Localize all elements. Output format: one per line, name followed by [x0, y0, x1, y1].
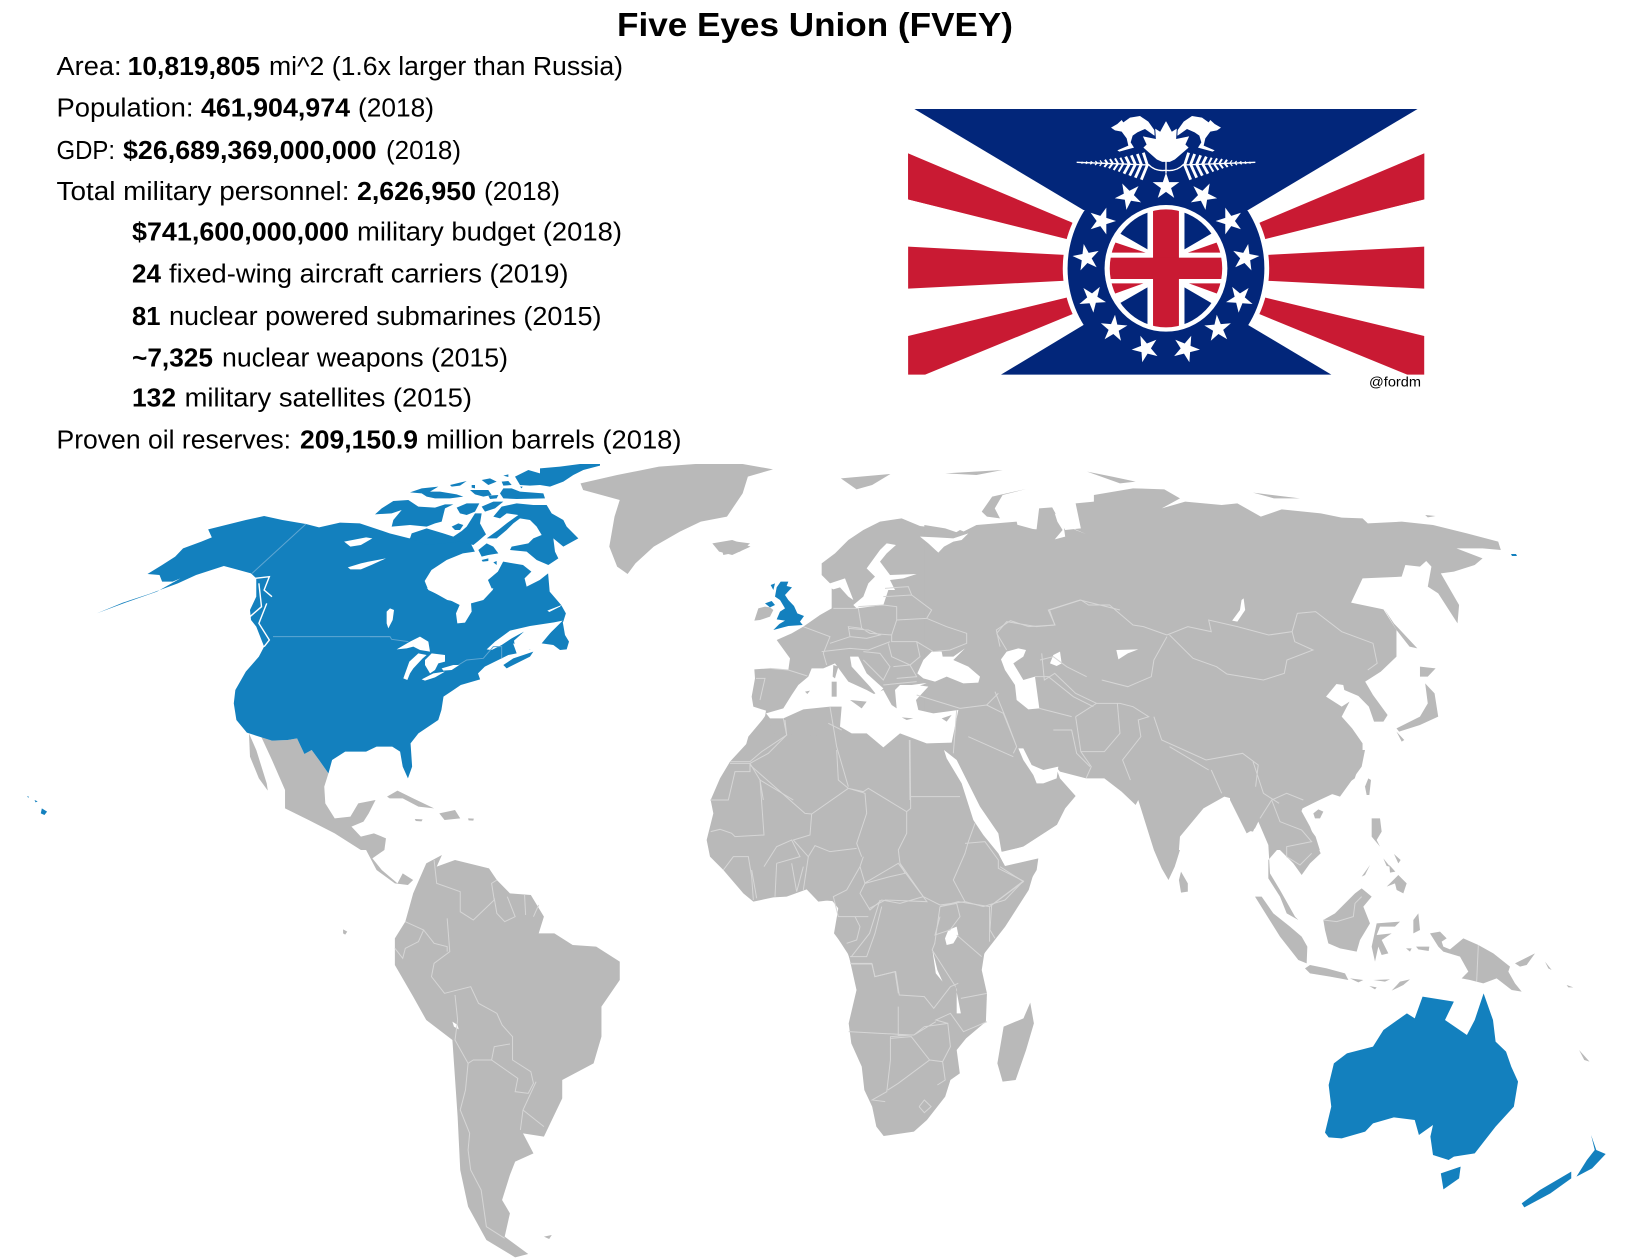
stat: satellites: 132 — [132, 385, 176, 413]
islands in the seas — [805, 665, 952, 722]
stat: military budget: military budget (2018) — [357, 219, 622, 247]
stat: GDP: $26,689,369,000,000 — [123, 137, 377, 165]
stat: aircraft carriers: fixed-wing aircraft carriers (2019) — [169, 261, 568, 289]
flag stripes and field — [908, 109, 1424, 376]
stat: aircraft carriers: 24 — [132, 261, 162, 289]
emblem: kangaroos, maple leaf and ferns — [1077, 116, 1255, 180]
stat: population: Population: — [56, 95, 194, 123]
Five Eyes territory: Australia and New Zealand — [1325, 993, 1606, 1207]
stars ring — [1071, 172, 1261, 366]
stat: total military personnel: (2018) — [484, 178, 560, 206]
world map — [27, 464, 1606, 1257]
stat: area — [56, 53, 623, 81]
stat: area: mi^2 (1.6x larger than Russia) — [269, 53, 623, 81]
seas and lakes — [452, 513, 1245, 1029]
Five Eyes territory: United Kingdom — [765, 582, 804, 630]
stat: GDP: (2018) — [386, 137, 461, 165]
stat: military budget: $741,600,000,000 — [132, 219, 349, 247]
stat: oil reserves — [56, 426, 682, 454]
stat: oil reserves: million barrels (2018) — [426, 426, 682, 454]
stat: area: 10,819,805 — [128, 53, 260, 81]
stat: area: Area: — [56, 53, 122, 81]
Great Lakes and Gulf of St Lawrence — [370, 588, 569, 707]
grey land masses — [249, 464, 1590, 1257]
Aleutian islands — [1511, 554, 1517, 556]
Canadian Arctic archipelago — [375, 464, 600, 565]
stat: total military personnel: 2,626,950 — [357, 178, 476, 206]
Five Eyes territory: North America — [27, 464, 600, 815]
credit: @fordm — [1369, 374, 1421, 390]
stat: oil reserves: Proven oil reserves: — [56, 426, 291, 454]
stat: population — [56, 95, 434, 123]
flag — [908, 109, 1424, 376]
stat: GDP — [56, 137, 461, 165]
stat: military budget — [132, 219, 622, 247]
stat: population: (2018) — [358, 95, 434, 123]
title: Five Eyes Union (FVEY) — [617, 7, 1013, 44]
stat: GDP: GDP: — [56, 137, 115, 165]
stat: submarines: nuclear powered submarines (2015) — [169, 303, 602, 331]
stat: nuclear weapons: ~7,325 — [132, 345, 213, 373]
stat: satellites: military satellites (2015) — [185, 385, 472, 413]
stat: total military personnel: Total military personnel: — [56, 178, 350, 206]
mainland Alaska, Canada and United States — [27, 516, 566, 815]
stat: total military personnel — [56, 178, 560, 206]
stat: oil reserves: 209,150.9 — [300, 426, 418, 454]
national borders — [395, 587, 1478, 1238]
union jack roundel — [1102, 203, 1231, 337]
stat: population: 461,904,974 — [201, 95, 351, 123]
stat: nuclear weapons: nuclear weapons (2015) — [222, 345, 508, 373]
stat: submarines: 81 — [132, 303, 160, 331]
stats text block — [56, 53, 682, 454]
